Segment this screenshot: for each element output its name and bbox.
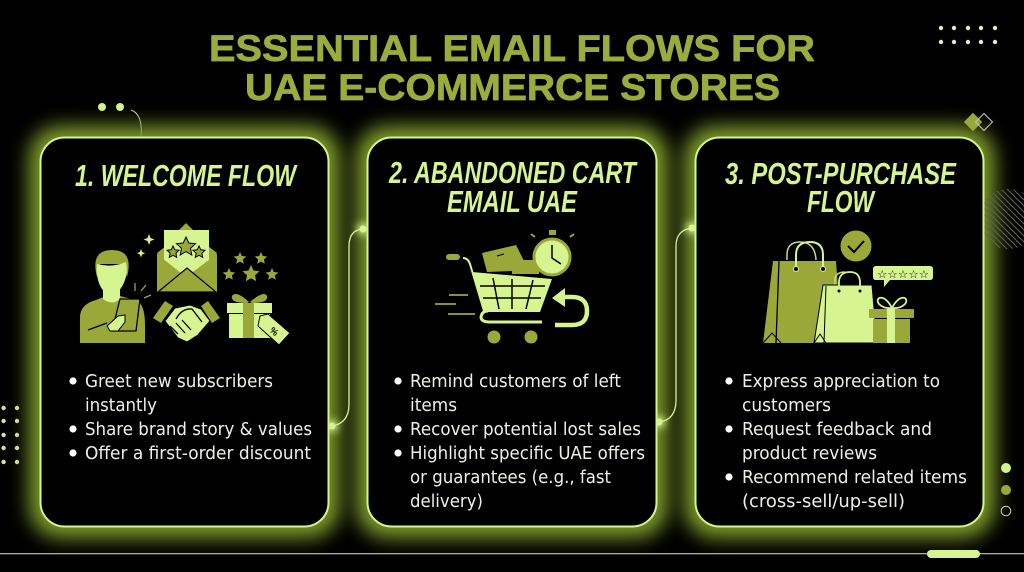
title: UAE E-COMMERCE STORES [245,66,780,108]
heading: abandoned cart: EMAIL UAE [447,185,578,219]
bullet list: welcome flow: Greet new subscribers [85,371,273,392]
decorative status dots [1001,463,1011,516]
icon: sparkles [137,234,154,257]
bullet list: abandoned cart: items [410,395,457,416]
decorative dots: top right grid [939,26,997,44]
decorative dots: left grid [1,406,19,464]
bullet list: post-purchase flow: product reviews [742,443,877,464]
icon: floating stars [223,252,278,281]
bullet list: post-purchase flow: Request feedback and [742,419,932,440]
heading: post-purchase flow: 3. POST-PURCHASE [725,157,957,191]
panel: welcome flow [40,138,328,526]
icon: handshake [153,301,220,342]
card glows [29,126,995,538]
bullet list: welcome flow: instantly [85,395,157,416]
icon: envelope with stars [157,223,217,292]
bullet list: welcome flow: Share brand story & values [85,419,312,440]
bullet list: post-purchase flow: customers [742,395,831,416]
decorative hatch circle [984,189,1024,249]
bullet list: post-purchase flow: (cross-sell/up-sell) [742,491,905,512]
heading: welcome flow: 1. WELCOME FLOW [75,159,298,193]
heading: post-purchase flow: FLOW [807,185,876,219]
title: ESSENTIAL EMAIL FLOWS FOR [209,27,815,69]
icon: shopping bags, check, review and gift [763,230,933,343]
icon: gift with tag [227,294,290,345]
panel: post-purchase flow [696,138,984,526]
icon: person with phone [80,250,151,343]
bullet list: post-purchase flow: Recommend related items [742,467,967,488]
bullet list: abandoned cart [394,371,645,512]
bullet list: post-purchase flow [725,371,967,512]
bullet list: abandoned cart: or guarantees (e.g., fast [410,467,611,488]
bullet list: welcome flow [69,371,312,464]
icon: shopping bags, check, review and gift: ☆☆☆☆☆ [877,268,929,281]
bottom rule with pill [0,550,1024,558]
connector: card 1 to card 2 [326,223,369,432]
decorative diamonds [964,113,992,131]
connector: card 2 to card 3 [653,222,698,428]
bullet list: abandoned cart: delivery) [410,491,483,512]
icon: shopping cart with timer [435,230,587,344]
heading: abandoned cart [388,156,638,219]
bullet list: welcome flow: Offer a first-order discount [85,443,311,464]
title [209,27,815,108]
heading: post-purchase flow [725,157,957,219]
decorative dots: top left with curve [98,103,141,137]
bullet list: abandoned cart: Recover potential lost sales [410,419,641,440]
bullet list: post-purchase flow: Express appreciation to [742,371,940,392]
panel: abandoned cart [368,138,656,526]
bullet list: abandoned cart: Remind customers of left [410,371,621,392]
heading: abandoned cart: 2. ABANDONED CART [388,156,638,190]
icon: gift with tag: % [268,325,280,338]
bullet list: abandoned cart: Highlight specific UAE offers [410,443,645,464]
